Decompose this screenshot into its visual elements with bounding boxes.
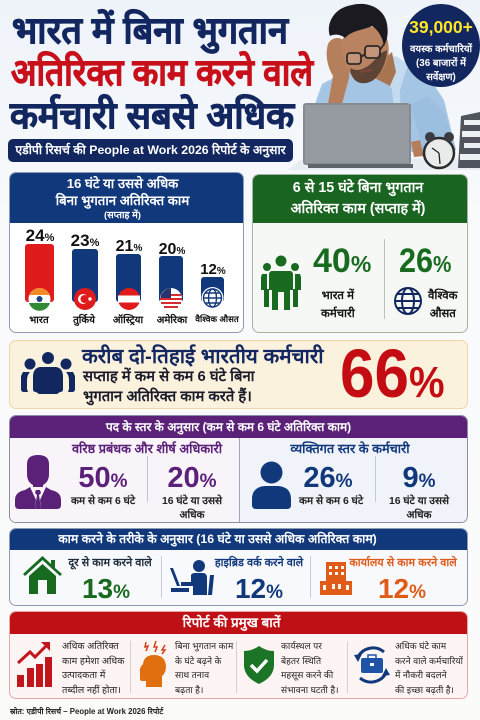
icon: globe navy	[394, 287, 422, 315]
hybrid stat: 12%	[235, 573, 283, 604]
takeaway 2	[175, 641, 234, 695]
bar: Turkey: 23%	[71, 231, 100, 250]
illustration: stressed worker at laptop	[288, 4, 480, 170]
bar chart: 16+ hours	[25, 226, 240, 326]
takeaway 1: काम हमेशा अधिक	[62, 654, 124, 666]
badge number: 39,000+	[409, 17, 473, 37]
bar: India	[25, 226, 55, 311]
title	[9, 8, 315, 136]
stat 9%: 9%	[402, 462, 436, 494]
subtitle pill	[8, 139, 293, 162]
takeaway 2: बढ़ता है।	[175, 684, 203, 694]
icon: head with stress	[140, 640, 166, 687]
icon: navy group	[21, 352, 75, 394]
icon: office buildings	[320, 562, 352, 595]
bar: Austria	[116, 238, 142, 310]
panel header	[10, 529, 467, 550]
takeaway 1	[62, 640, 125, 694]
icon: house	[23, 556, 62, 594]
caption: 16 घंटे या उससे	[162, 496, 222, 507]
stat 50%: 50%	[78, 462, 128, 494]
caption: 16 घंटे या उससे	[389, 496, 449, 507]
takeaway 1: अधिक अतिरिक्त	[62, 640, 119, 651]
stat 20%: 20%	[167, 462, 217, 494]
panel header	[10, 416, 467, 438]
caption: India	[320, 288, 356, 320]
bar: USA	[159, 241, 185, 310]
stat: global 26%: 26%	[399, 242, 451, 280]
caption: कम से कम 6 घंटे	[299, 496, 363, 507]
panel header: 6 से 15 घंटे बिना भुगतान	[293, 180, 423, 196]
panel header: 16 घंटे या उससे अधिक	[67, 176, 178, 191]
divider	[310, 556, 311, 598]
stat 26%: 26%	[303, 462, 353, 494]
hybrid label: हाइब्रिड वर्क करने वाले	[215, 557, 303, 569]
caption: global	[428, 288, 458, 320]
icon: security shield check	[244, 646, 274, 684]
takeaway 4: करने वाले कर्मचारियों	[395, 656, 463, 666]
caption: कम से कम 6 घंटे	[71, 496, 135, 507]
divider	[130, 641, 131, 693]
icon: briefcase with cycle arrows	[354, 646, 390, 684]
icon: manager in suit	[15, 455, 61, 509]
takeaway 3: बेहतर स्थिति	[281, 656, 321, 666]
caption: अधिक	[406, 510, 432, 521]
bar: global average: 12%	[200, 261, 226, 278]
caption: अधिक	[180, 510, 204, 521]
title line 1: भारत में बिना भुगतान	[12, 9, 289, 54]
panel header	[10, 173, 243, 223]
caption: global: औसत	[430, 308, 456, 320]
caption	[162, 494, 222, 521]
callout text: सप्ताह में कम से कम 6 घंटे बिना	[83, 369, 254, 385]
divider	[375, 456, 376, 502]
bar: global average	[200, 261, 226, 309]
panel header: अतिरिक्त काम (सप्ताह में)	[291, 201, 425, 217]
caption: global: वैश्विक	[428, 290, 458, 302]
takeaway 4: में नौकरी बदलने	[395, 670, 447, 680]
office label: कार्यालय से काम करने वाले	[349, 557, 457, 569]
takeaway 1: उत्पादकता में	[62, 669, 105, 680]
takeaway 2: साथ तनाव	[175, 670, 209, 680]
stat: India 40%: 40%	[313, 242, 371, 280]
icon: green group of people	[261, 256, 301, 310]
panel header: बिना भुगतान अतिरिक्त काम	[56, 193, 189, 208]
panel header: रिपोर्ट की प्रमुख बातें	[183, 615, 280, 630]
title line 3: कर्मचारी सबसे अधिक	[9, 94, 296, 136]
panel header	[10, 612, 467, 634]
labels: वैश्विक औसत	[194, 314, 240, 324]
panel header: काम करने के तरीके के अनुसार (16 घंटे या उससे अधिक अतिरिक्त काम)	[58, 532, 377, 546]
panel: key takeaways	[9, 611, 468, 699]
takeaway 3	[281, 641, 339, 694]
takeaway 4: अधिक घंटे काम	[395, 641, 446, 651]
subtitle pill: एडीपी रिसर्च की People at Work 2026 रिपोर्ट के अनुसार	[15, 143, 286, 157]
callout heading: करीब दो-तिहाई भारतीय कर्मचारी	[82, 345, 324, 368]
divider	[236, 641, 237, 693]
badge caption: सर्वेक्षण)	[426, 72, 456, 83]
office stat: 12%	[378, 573, 426, 604]
divider	[161, 556, 162, 598]
badge: survey size	[402, 4, 480, 87]
takeaway 4	[395, 641, 464, 695]
bar: Turkey	[71, 231, 100, 310]
divider	[347, 641, 348, 693]
takeaway 4: की इच्छा बढ़ती है।	[395, 684, 454, 694]
source note: स्रोत: एडीपी रिसर्च – People at Work 2026 रिपोर्ट	[10, 707, 163, 716]
takeaway 3: महसूस करने की	[281, 670, 333, 680]
sub-panel heading: व्यक्तिगत स्तर के कर्मचारी	[290, 441, 410, 456]
takeaway 3: कार्यस्थल पर	[281, 641, 322, 651]
title line 2: अतिरिक्त काम करने वाले	[11, 51, 315, 93]
labels: ऑस्ट्रिया	[113, 313, 143, 326]
remote stat: 13%	[82, 573, 130, 604]
bar: Austria: 21%	[116, 238, 142, 255]
icon: individual worker	[252, 462, 291, 509]
remote label: दूर से काम करने वाले	[68, 557, 152, 569]
takeaway 3: संभावना घटती है।	[281, 684, 339, 694]
labels: भारत	[29, 315, 50, 326]
sub-panel: senior managers	[10, 438, 239, 524]
labels: तुर्किये	[72, 313, 96, 326]
badge caption	[410, 43, 472, 83]
panel: by work mode	[9, 528, 468, 606]
labels	[29, 313, 240, 326]
badge caption: (36 बाजारों में	[416, 58, 466, 69]
caption: India: भारत में	[322, 290, 354, 302]
caption: India: कर्मचारी	[321, 308, 355, 320]
bar: USA: 20%	[159, 241, 185, 258]
labels: अमेरिका	[157, 313, 188, 326]
panel header: (सप्ताह में)	[104, 210, 141, 221]
panel: 6 to 15 hours	[252, 174, 468, 333]
divider	[147, 456, 148, 502]
badge caption: वयस्क कर्मचारियों	[410, 44, 472, 55]
bar: India: 24%	[26, 226, 55, 245]
callout text	[82, 368, 255, 406]
panel: 16+ hours by country	[9, 172, 244, 333]
sub-panel: individual contributors	[239, 438, 469, 524]
sub-panel heading: वरिष्ठ प्रबंधक और शीर्ष अधिकारी	[72, 441, 222, 456]
panel header: पद के स्तर के अनुसार (कम से कम 6 घंटे अतिरिक्त काम)	[106, 420, 351, 434]
panel header	[253, 175, 467, 223]
takeaway 2: बिना भुगतान काम	[175, 641, 233, 651]
caption	[389, 494, 450, 521]
icon: person at laptop	[170, 560, 214, 595]
panel: by job level	[9, 415, 468, 523]
takeaway 2: के घंटे बढ़ने के	[175, 656, 221, 666]
divider	[384, 239, 385, 319]
panel: two-thirds callout	[9, 340, 468, 409]
takeaway 1: तब्दील नहीं होता।	[62, 684, 121, 694]
icon: rising bar chart	[17, 642, 52, 687]
callout text: भुगतान अतिरिक्त काम करते हैं।	[83, 389, 252, 405]
